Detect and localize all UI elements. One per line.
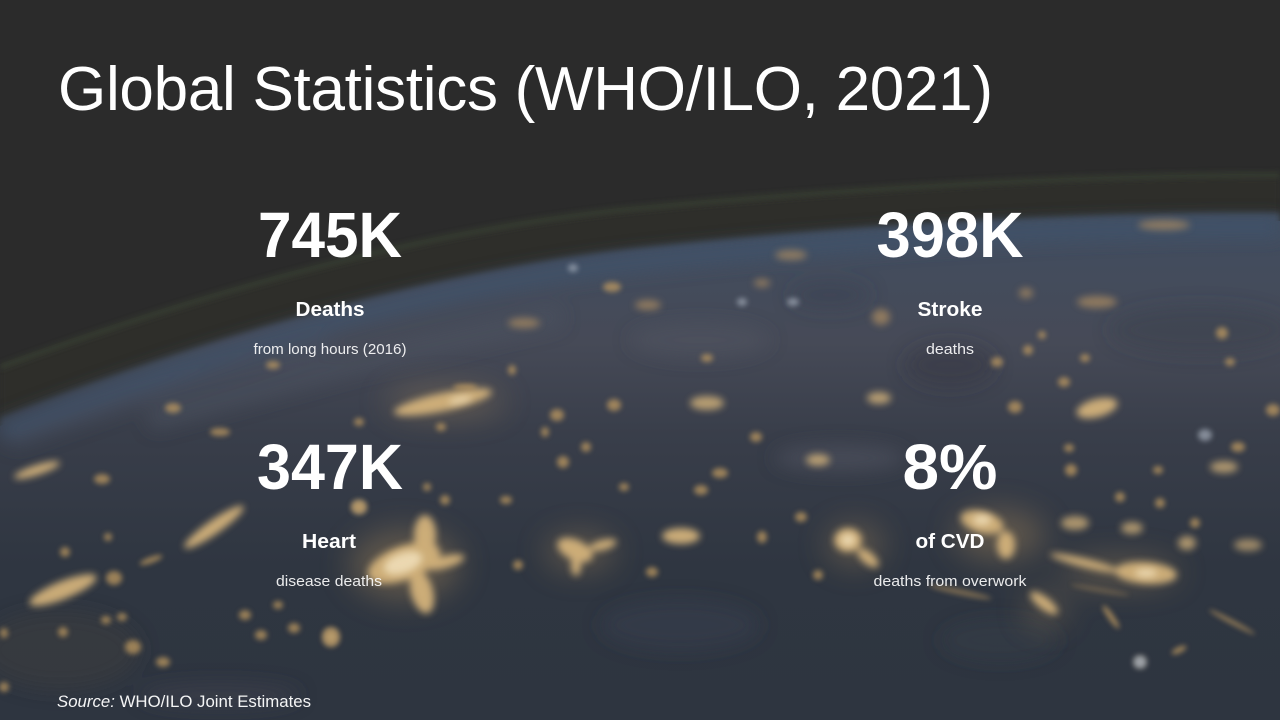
stat card: 398K stroke (876, 199, 1024, 358)
dim lights near the horizon (508, 220, 1190, 328)
stat value: 347K: 347K (257, 431, 403, 503)
small city lights (0, 282, 1280, 692)
stat label: Heart: Heart (302, 531, 356, 553)
source note: Source: WHO/ILO Joint Estimates (57, 692, 311, 711)
pale lights (568, 264, 1212, 668)
stat note: disease deaths: disease deaths (276, 573, 382, 590)
title: Global Statistics (WHO/ILO, 2021) (58, 55, 993, 124)
glow around major city clusters (350, 388, 1180, 625)
stat value: 745K: 745K (258, 199, 402, 271)
stat value: 398K: 398K (876, 199, 1024, 271)
stat note: from long hours (2016): from long hours (2016) (254, 341, 406, 358)
stat label: Deaths: Deaths (296, 299, 364, 321)
stat label: Stroke: Stroke (918, 299, 982, 321)
stat label: of CVD: of CVD (916, 531, 984, 553)
stat card: 8% of CVD (874, 431, 1027, 590)
stat note: deaths: deaths (926, 341, 974, 358)
stat value: 8%: 8% (902, 431, 998, 503)
large city lights (13, 383, 1262, 618)
stat card: 347K heart (257, 431, 403, 590)
stat card: 745K deaths (254, 199, 406, 358)
stat note: deaths from overwork: deaths from overwork (874, 573, 1027, 590)
